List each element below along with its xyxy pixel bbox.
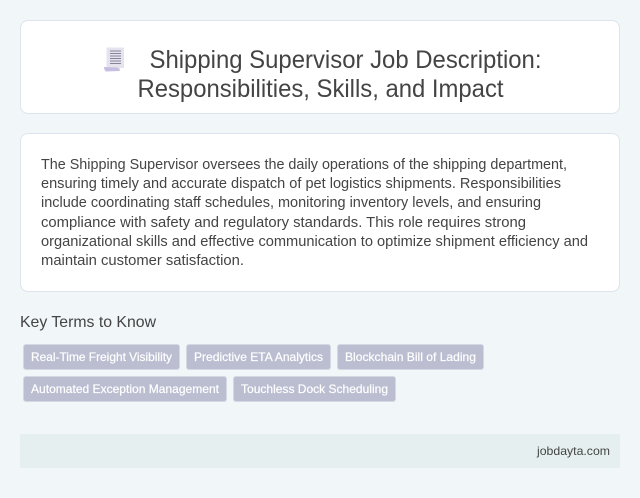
description text: include coordinating staff schedules, monitoring inventory levels, and ensuring [41, 195, 541, 211]
description text: ensuring timely and accurate dispatch of pet logistics shipments. Responsibilities [41, 176, 561, 192]
panel: title card [20, 20, 620, 114]
heading: Key Terms to Know: Key Terms to Know [20, 314, 156, 331]
description text: organizational skills and effective communication to optimize shipment efficiency and [41, 234, 588, 250]
chip labels: Automated Exception Management [31, 382, 220, 396]
title: Shipping Supervisor Job Description: [150, 46, 542, 74]
description text: maintain customer satisfaction. [41, 253, 244, 269]
chip: Real-Time Freight Visibility [23, 344, 180, 370]
description text: compliance with safety and regulatory standards. This role requires strong [41, 215, 526, 231]
icon: document receipt [104, 48, 124, 72]
chip labels: Predictive ETA Analytics [194, 350, 323, 364]
description text [41, 157, 588, 269]
chip labels: Real-Time Freight Visibility [31, 350, 172, 364]
description text: The Shipping Supervisor oversees the daily operations of the shipping department, [41, 157, 567, 173]
chip: Predictive ETA Analytics [186, 344, 331, 370]
chip: Blockchain Bill of Lading [337, 344, 484, 370]
chip labels: Touchless Dock Scheduling [241, 382, 388, 396]
chip labels [31, 350, 476, 396]
panel: description card [20, 133, 620, 292]
title [138, 46, 542, 103]
chip: Automated Exception Management [23, 376, 227, 402]
chip labels: Blockchain Bill of Lading [345, 350, 476, 364]
footer text: jobdayta.com [536, 444, 610, 458]
chip: Touchless Dock Scheduling [233, 376, 396, 402]
footer bar [20, 434, 620, 468]
title: Responsibilities, Skills, and Impact [138, 75, 504, 103]
